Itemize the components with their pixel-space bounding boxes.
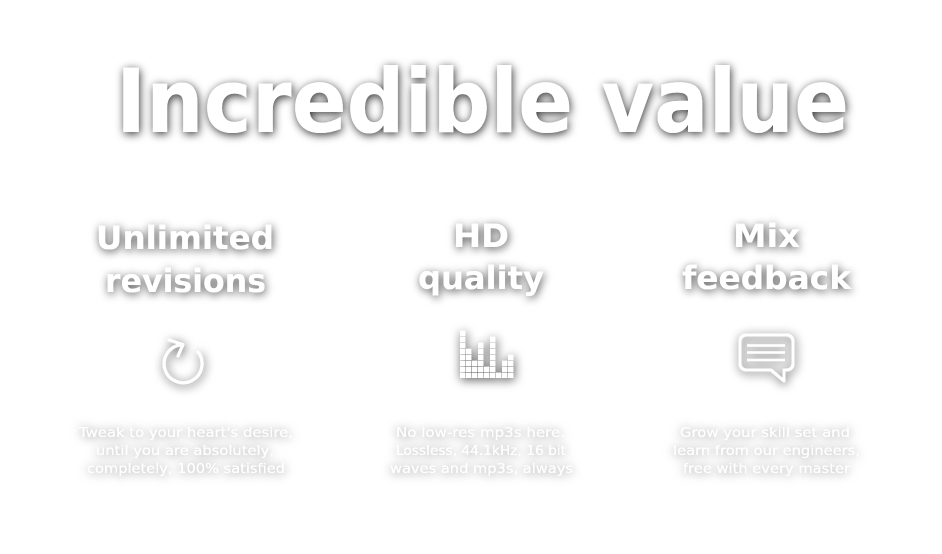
text: quality description: No low-res mp3s here. <box>396 425 565 441</box>
panel: unlimited revisions <box>78 219 293 477</box>
text: revisions description: completely, 100% satisfied <box>87 461 285 477</box>
icon: speech bubble <box>740 335 793 381</box>
text: quality description <box>390 425 573 477</box>
heading: mix feedback <box>682 217 852 297</box>
text: feedback description <box>673 425 860 477</box>
heading: mix feedback: feedback <box>682 259 852 297</box>
heading: unlimited revisions: Unlimited <box>96 219 274 257</box>
heading: mix feedback: Mix <box>733 217 800 255</box>
text: revisions description: until you are absolutely, <box>96 443 274 459</box>
text: revisions description: Tweak to your heart's desire, <box>78 425 293 441</box>
heading: unlimited revisions <box>96 219 274 300</box>
title: Incredible value <box>116 50 849 153</box>
text: feedback description: learn from our engineers, <box>673 443 860 459</box>
panel: hd quality <box>390 217 573 477</box>
heading: hd quality <box>418 217 544 297</box>
heading: hd quality: quality <box>418 259 544 297</box>
text: quality description: Lossless, 44.1kHz, 16 bit <box>396 443 566 459</box>
icon: equalizer bars <box>463 330 511 378</box>
heading: unlimited revisions: revisions <box>105 262 266 300</box>
heading: hd quality: HD <box>453 217 509 255</box>
panel: mix feedback <box>673 217 860 477</box>
text: quality description: waves and mp3s, always <box>390 461 573 477</box>
text: revisions description <box>78 425 293 477</box>
icon: refresh arrow <box>164 340 202 383</box>
text: feedback description: Grow your skill set and <box>680 425 850 441</box>
text: feedback description: free with every master <box>683 461 850 477</box>
